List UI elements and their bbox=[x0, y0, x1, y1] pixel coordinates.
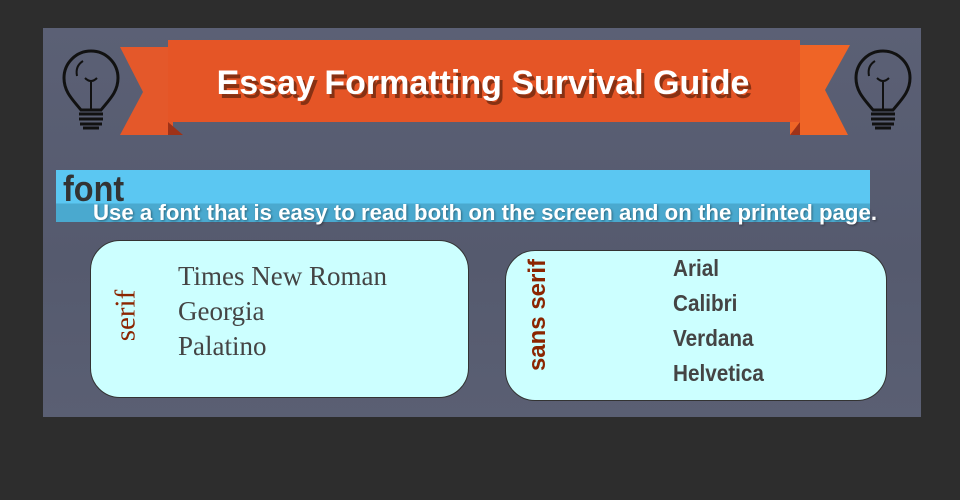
banner bbox=[62, 40, 912, 135]
list: serif fonts: Times New Roman bbox=[178, 261, 387, 291]
list: sans serif fonts bbox=[673, 255, 764, 386]
list: serif fonts bbox=[178, 261, 387, 361]
banner ribbon bbox=[120, 40, 850, 135]
panel: main board bbox=[43, 28, 921, 417]
list: sans serif fonts: Verdana bbox=[673, 325, 754, 351]
banner ribbon: Essay Formatting Survival Guide bbox=[217, 64, 749, 102]
list: serif fonts: Palatino bbox=[178, 331, 266, 361]
icon: light bulb left bbox=[64, 51, 118, 128]
panel: serif bbox=[90, 240, 469, 398]
heading: font: font bbox=[63, 168, 124, 209]
list: serif fonts: Georgia bbox=[178, 296, 264, 326]
list: sans serif fonts: Arial bbox=[673, 255, 719, 281]
panel: sans serif bbox=[505, 250, 887, 401]
icon: light bulb right bbox=[856, 51, 910, 128]
list: sans serif fonts: Helvetica bbox=[673, 360, 764, 386]
list: sans serif fonts: Calibri bbox=[673, 290, 737, 316]
text: font advice: Use a font that is easy to read both on the screen and on the printed page. bbox=[93, 200, 877, 225]
label: serif: serif bbox=[110, 290, 142, 341]
heading strip: font bbox=[56, 170, 870, 222]
label: sans serif: sans serif bbox=[524, 259, 551, 371]
banner ribbon: Essay Formatting Survival Guide bbox=[220, 68, 752, 106]
